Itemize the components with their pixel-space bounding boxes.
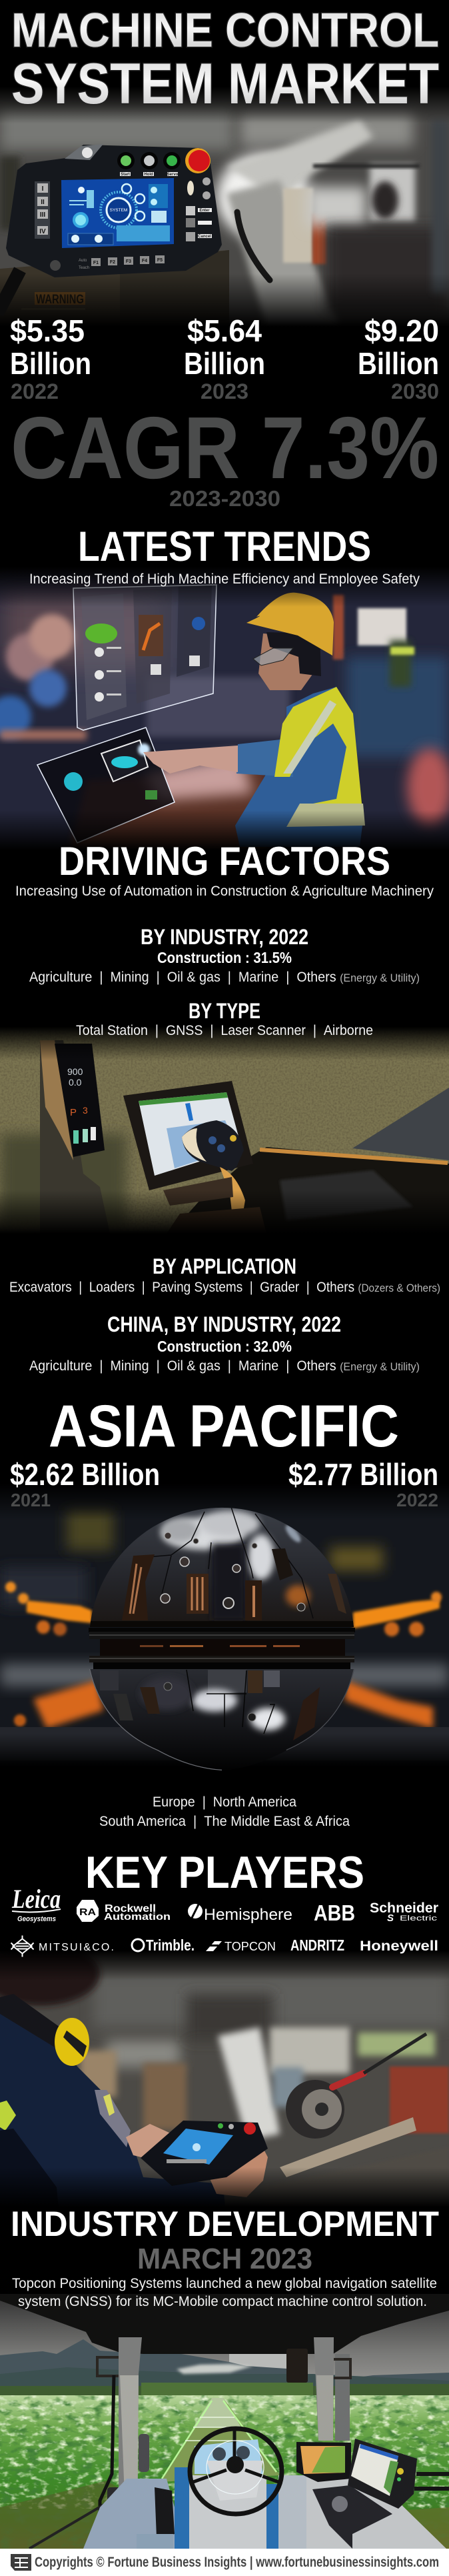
text: development description: [12, 2276, 437, 2309]
panel: tractor cab field photo: [0, 2294, 449, 2549]
logo: Rockwell Automation: Rockwell: [105, 1903, 156, 1914]
block: by type: BY TYPE: [189, 999, 260, 1023]
logo: Schneider Electric: [370, 1900, 438, 1924]
logo: Mitsui and Co: MITSUI&CO.: [39, 1942, 114, 1953]
heading: asia pacific: ASIA PACIFIC: [49, 1392, 399, 1459]
stat: 2023 market size: [184, 313, 265, 403]
block: by type: [76, 999, 373, 1038]
function keys: F4: [142, 259, 147, 263]
block: china by industry: [29, 1312, 420, 1374]
heading: driving factors: [15, 839, 434, 899]
backdrop: [0, 567, 449, 867]
icon: control pendant: [6, 144, 222, 277]
worker: [143, 593, 365, 847]
operator: [0, 1955, 268, 2202]
logo: Hemisphere: Hemisphere: [204, 1906, 292, 1924]
function keys: F2: [110, 260, 115, 265]
stat: 2030 market size: Billion: [358, 346, 439, 381]
block: china by industry: Construction : 32.0%: [157, 1338, 292, 1355]
factory backdrop: [0, 91, 449, 324]
warning label: WARNING: [36, 293, 84, 307]
pendant screen: [61, 178, 174, 248]
block: by application: Excavators | Loaders | Paving Systems | Grader | Others (Dozers & Others): [9, 1280, 440, 1295]
logo: ABB: ABB: [314, 1900, 355, 1925]
panel: latest trends photo: [0, 567, 449, 867]
logo: Schneider Electric: S: [387, 1912, 394, 1924]
left mode keys: II: [41, 199, 45, 206]
block: by application: [9, 1254, 440, 1295]
panel: hero photo with control pendant: [0, 91, 449, 324]
logo: Schneider Electric: Schneider: [370, 1900, 438, 1916]
sphere upper hemisphere: [87, 1504, 360, 1630]
title: [11, 4, 439, 116]
logo: Leica Geosystems: Geosystems: [17, 1915, 56, 1923]
sphere lower hemisphere: [87, 1667, 360, 1774]
sky and landscape: [0, 2294, 449, 2549]
stat: 2022 market size: 2022: [11, 379, 59, 403]
motor and red handle: [286, 2034, 426, 2139]
heading: latest trends: [29, 523, 420, 587]
left mode keys: [35, 181, 50, 239]
heading: latest trends: Increasing Trend of High Machine Efficiency and Employee Safety: [29, 571, 420, 587]
button captions: Start: [121, 173, 130, 177]
cab pillar display: 3: [83, 1105, 88, 1116]
logo: Honeywell: Honeywell: [360, 1939, 438, 1954]
cab pillars and mirror: [29, 2337, 350, 2549]
logo: Hemisphere: [188, 1902, 292, 1924]
footer bar: [0, 2549, 449, 2576]
block: by industry 2022: Agriculture | Mining | Oil & gas | Marine | Others (Energy & Utility): [29, 970, 420, 985]
block: by type: Total Station | GNSS | Laser Scanner | Airborne: [76, 1023, 373, 1038]
heading: driving factors: DRIVING FACTORS: [59, 839, 390, 884]
block: by application: BY APPLICATION: [153, 1254, 296, 1278]
stat: 2021 region value: 2021: [11, 1490, 51, 1510]
stat: 2022 region value: 2022: [396, 1490, 438, 1510]
tunnel backdrop: [0, 1494, 449, 1760]
stat: 2022 region value: [288, 1457, 438, 1510]
function keys: Auto: [79, 259, 87, 263]
cab pillar display: 900: [67, 1066, 83, 1077]
stat: 2023 market size: Billion: [184, 346, 265, 381]
stat: 2021 region value: $2.62 Billion: [10, 1457, 160, 1492]
list: other regions: Europe | North America: [153, 1794, 296, 1810]
text: development description: system (GNSS) for its MC-Mobile compact machine control solution.: [18, 2294, 427, 2309]
stat: 2022 market size: $5.35: [10, 313, 85, 348]
factory backdrop: [0, 1951, 449, 2224]
function keys: Teach: [79, 266, 89, 270]
logo: Leica Geosystems: Leica: [11, 1884, 61, 1914]
top buttons: [117, 148, 211, 173]
stat: 2030 market size: 2030: [391, 379, 439, 403]
function keys: [50, 255, 165, 271]
logo: Rockwell Automation: Automation: [104, 1911, 171, 1922]
stat: 2021 region value: [10, 1457, 160, 1510]
block: china by industry: Agriculture | Mining | Oil & gas | Marine | Others (Energy & Utility): [29, 1358, 420, 1374]
right controls: Cancel: [198, 235, 211, 239]
warning label: [35, 292, 85, 305]
stat: CAGR: 2023-2030: [169, 486, 280, 511]
logo: Rockwell Automation: RA: [79, 1906, 96, 1918]
logo: Mitsui and Co: [11, 1935, 114, 1957]
metallic sphere: [87, 1504, 360, 1774]
button captions: Hold: [144, 173, 153, 177]
logo: Trimble: Trimble.: [146, 1937, 195, 1954]
pendant screen: SYSTEM: [110, 208, 127, 213]
function keys: F5: [157, 258, 163, 263]
block: china by industry: CHINA, BY INDUSTRY, 2022: [107, 1312, 341, 1336]
list: other regions: [99, 1794, 350, 1829]
guidance monitors: [296, 2439, 449, 2509]
logo: Andritz: ANDRITZ: [290, 1937, 344, 1954]
joystick: [163, 1120, 266, 1234]
right controls: Enter: [199, 209, 210, 213]
block: by industry 2022: Construction : 31.5%: [157, 949, 292, 966]
sphere equator bands: [89, 1628, 355, 1669]
text: development description: Topcon Positioning Systems launched a new global navigation satellite: [12, 2276, 437, 2291]
steering wheel: [190, 2429, 282, 2514]
left mode keys: III: [40, 211, 45, 219]
stat: 2023 market size: 2023: [201, 379, 248, 403]
heading: driving factors: Increasing Use of Automation in Construction & Agriculture Machinery: [15, 884, 434, 899]
list: other regions: South America | The Middle East & Africa: [99, 1814, 350, 1829]
logo: Topcon: TOPCON: [224, 1940, 276, 1953]
stat: 2030 market size: [358, 313, 439, 403]
handheld pendant: [141, 2121, 268, 2186]
function keys: F3: [126, 259, 131, 264]
panel: in-cab display photo: [0, 1030, 449, 1231]
button captions: Servo: [167, 173, 179, 177]
left mode keys: IV: [39, 228, 46, 235]
dashboard: [83, 2439, 446, 2549]
stat: 2022 market size: Billion: [10, 346, 91, 381]
block: by industry 2022: [29, 925, 420, 985]
function keys: F1: [93, 261, 99, 265]
block: by industry 2022: BY INDUSTRY, 2022: [141, 925, 308, 949]
heading: key players: KEY PLAYERS: [85, 1847, 364, 1898]
heading: latest trends: LATEST TRENDS: [78, 523, 371, 570]
cab roof: [0, 2294, 449, 2354]
cab pillar display: [40, 1040, 107, 1218]
stat: 2023 market size: $5.64: [187, 313, 262, 348]
icon: Fortune Business Insights logo: [11, 2554, 31, 2571]
right controls: [186, 177, 212, 241]
panel: operator with pendant photo: [0, 1954, 449, 2203]
guidance monitor: [123, 1081, 253, 1190]
hologram upper panel: [73, 585, 217, 730]
stat: 2022 market size: [10, 313, 91, 403]
logo: Schneider Electric: Electric: [400, 1914, 438, 1922]
logo: Trimble: [132, 1937, 195, 1954]
gravel backdrop: [0, 1030, 449, 1231]
cab pillar display: P: [70, 1107, 77, 1118]
hologram lower panel: [37, 728, 175, 843]
button captions: [120, 172, 178, 176]
logo: Leica Geosystems: [11, 1884, 61, 1923]
panel: asia pacific sphere photo: [0, 1494, 449, 1770]
cab pillar display: 0.0: [69, 1077, 82, 1088]
stat: 2030 market size: $9.20: [364, 313, 439, 348]
icon: pendant cable: [0, 270, 20, 313]
date: march 2023: MARCH 2023: [137, 2243, 312, 2275]
left mode keys: I: [42, 185, 44, 193]
logo: Rockwell Automation: [77, 1900, 171, 1922]
